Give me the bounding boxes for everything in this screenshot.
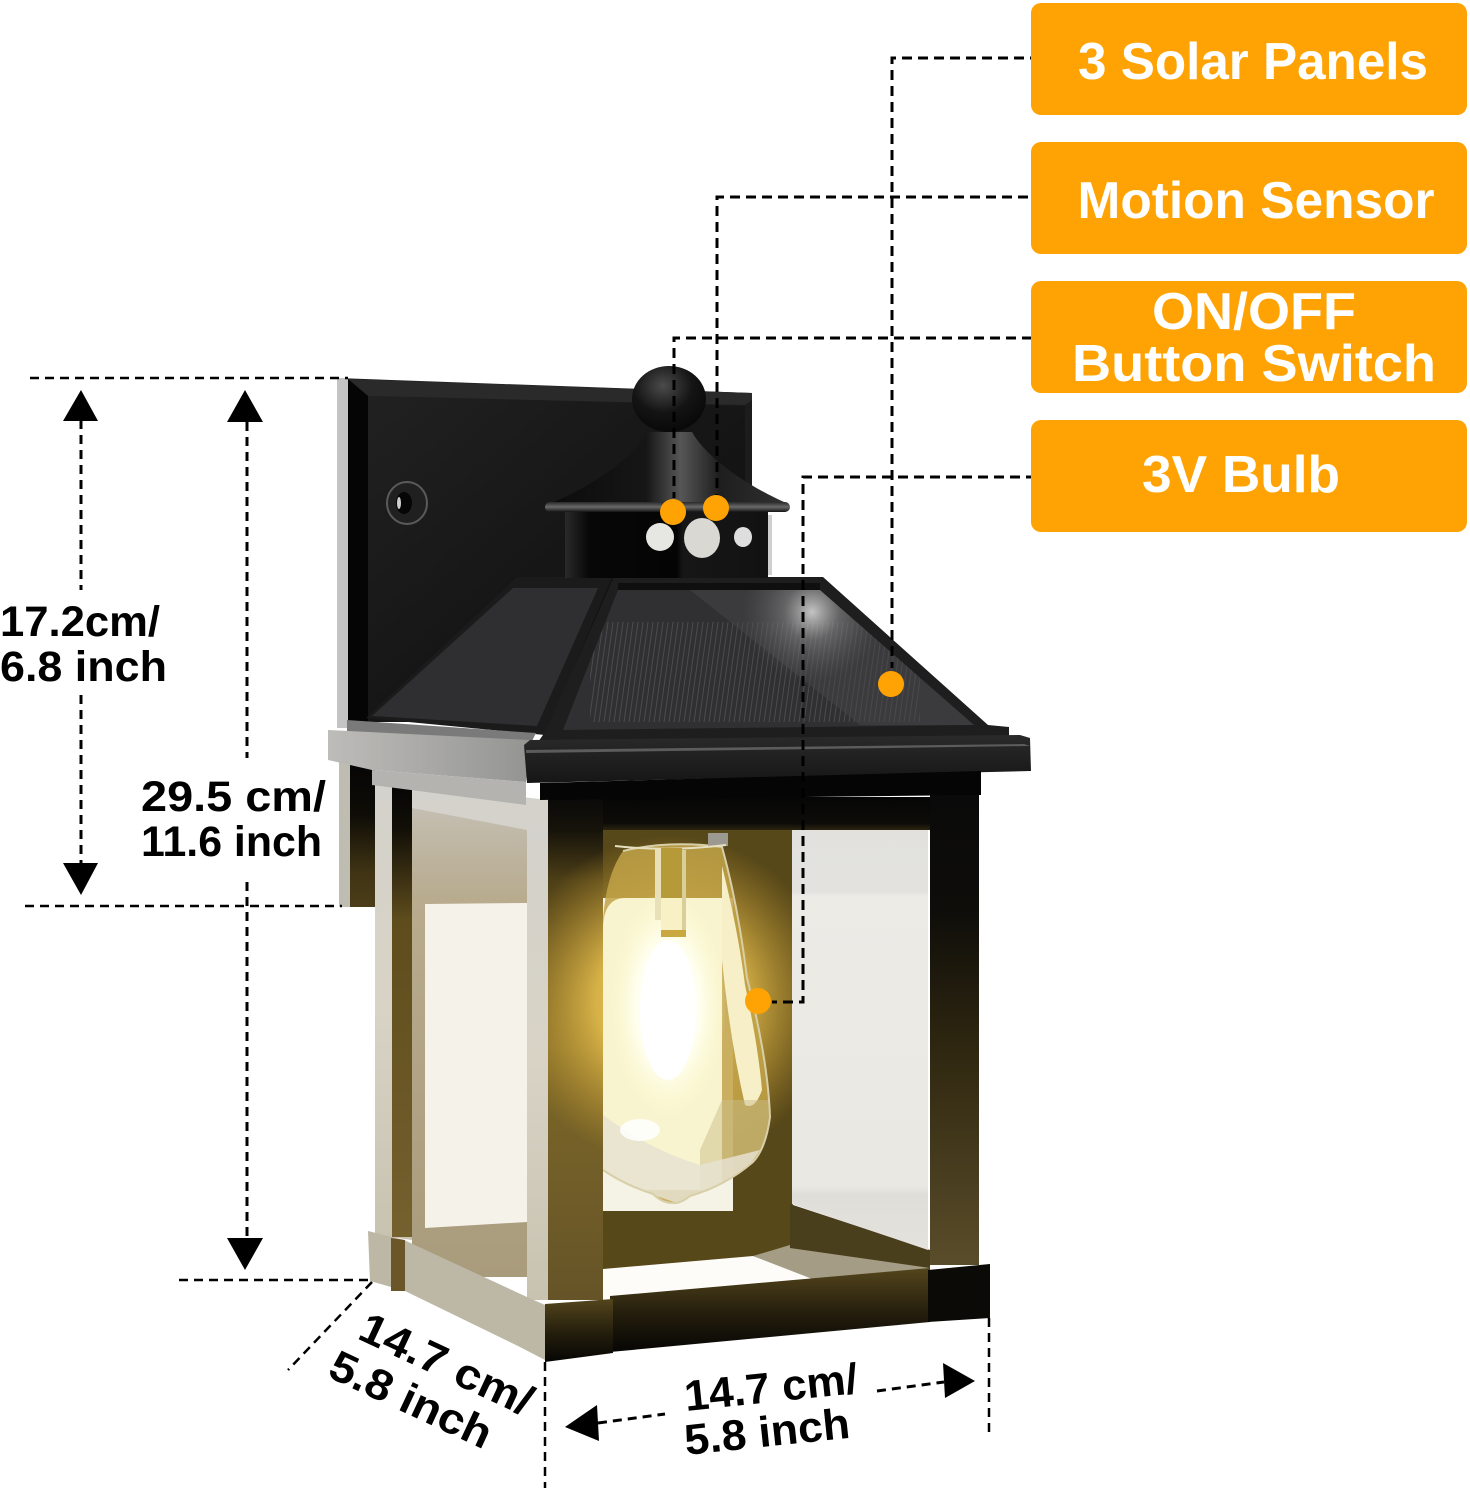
dimension: depth 14.7 cm: 5.8 inch xyxy=(322,1342,500,1459)
cap with sensors xyxy=(545,366,790,578)
label: 3 Solar Panels xyxy=(1031,3,1467,115)
front frame xyxy=(545,790,990,1362)
side frame and glass xyxy=(368,780,548,1360)
interior back and window xyxy=(603,825,930,1297)
bulb socket and stem xyxy=(615,833,728,937)
dimension: width 14.7 cm xyxy=(565,1355,975,1465)
label: ON/OFF Button Switch xyxy=(1031,281,1467,393)
label: ON/OFF Button Switch: Button Switch xyxy=(1072,335,1436,393)
dimension: width 14.7 cm: 5.8 inch xyxy=(682,1400,852,1465)
dimension: height 17.2cm xyxy=(0,390,167,895)
roof front solar panel xyxy=(536,577,1009,745)
dimension: height 17.2cm: 6.8 inch xyxy=(0,643,167,691)
right glass xyxy=(792,824,928,1250)
label: Motion Sensor xyxy=(1031,142,1467,254)
dimension: width 14.7 cm: 14.7 cm/ xyxy=(682,1355,860,1421)
dimension: height 29.5 cm: 29.5 cm/ xyxy=(141,773,326,821)
label: 3V Bulb xyxy=(1031,420,1467,532)
label: 3 Solar Panels: 3 Solar Panels xyxy=(1078,33,1428,91)
marker dots xyxy=(660,495,904,1014)
screw xyxy=(387,482,427,524)
dimension: depth 14.7 cm xyxy=(322,1304,541,1459)
label: Motion Sensor: Motion Sensor xyxy=(1078,172,1434,230)
bulb outline xyxy=(603,844,770,1203)
dimension: height 29.5 cm: 11.6 inch xyxy=(141,818,322,866)
dimension guide lines xyxy=(25,378,989,1488)
roof side panel xyxy=(328,577,612,805)
bulb xyxy=(603,840,773,1210)
dimension: height 17.2cm: 17.2cm/ xyxy=(0,598,160,646)
label: 3V Bulb: 3V Bulb xyxy=(1142,446,1340,504)
roof eave xyxy=(524,735,1031,800)
dimension: height 29.5 cm xyxy=(141,390,326,1270)
dimension: depth 14.7 cm: 14.7 cm/ xyxy=(352,1304,541,1426)
label: ON/OFF Button Switch: ON/OFF xyxy=(1152,283,1356,341)
lamp illustration xyxy=(328,366,1031,1362)
wall back plate xyxy=(337,378,752,907)
leader lines xyxy=(674,58,1044,1002)
